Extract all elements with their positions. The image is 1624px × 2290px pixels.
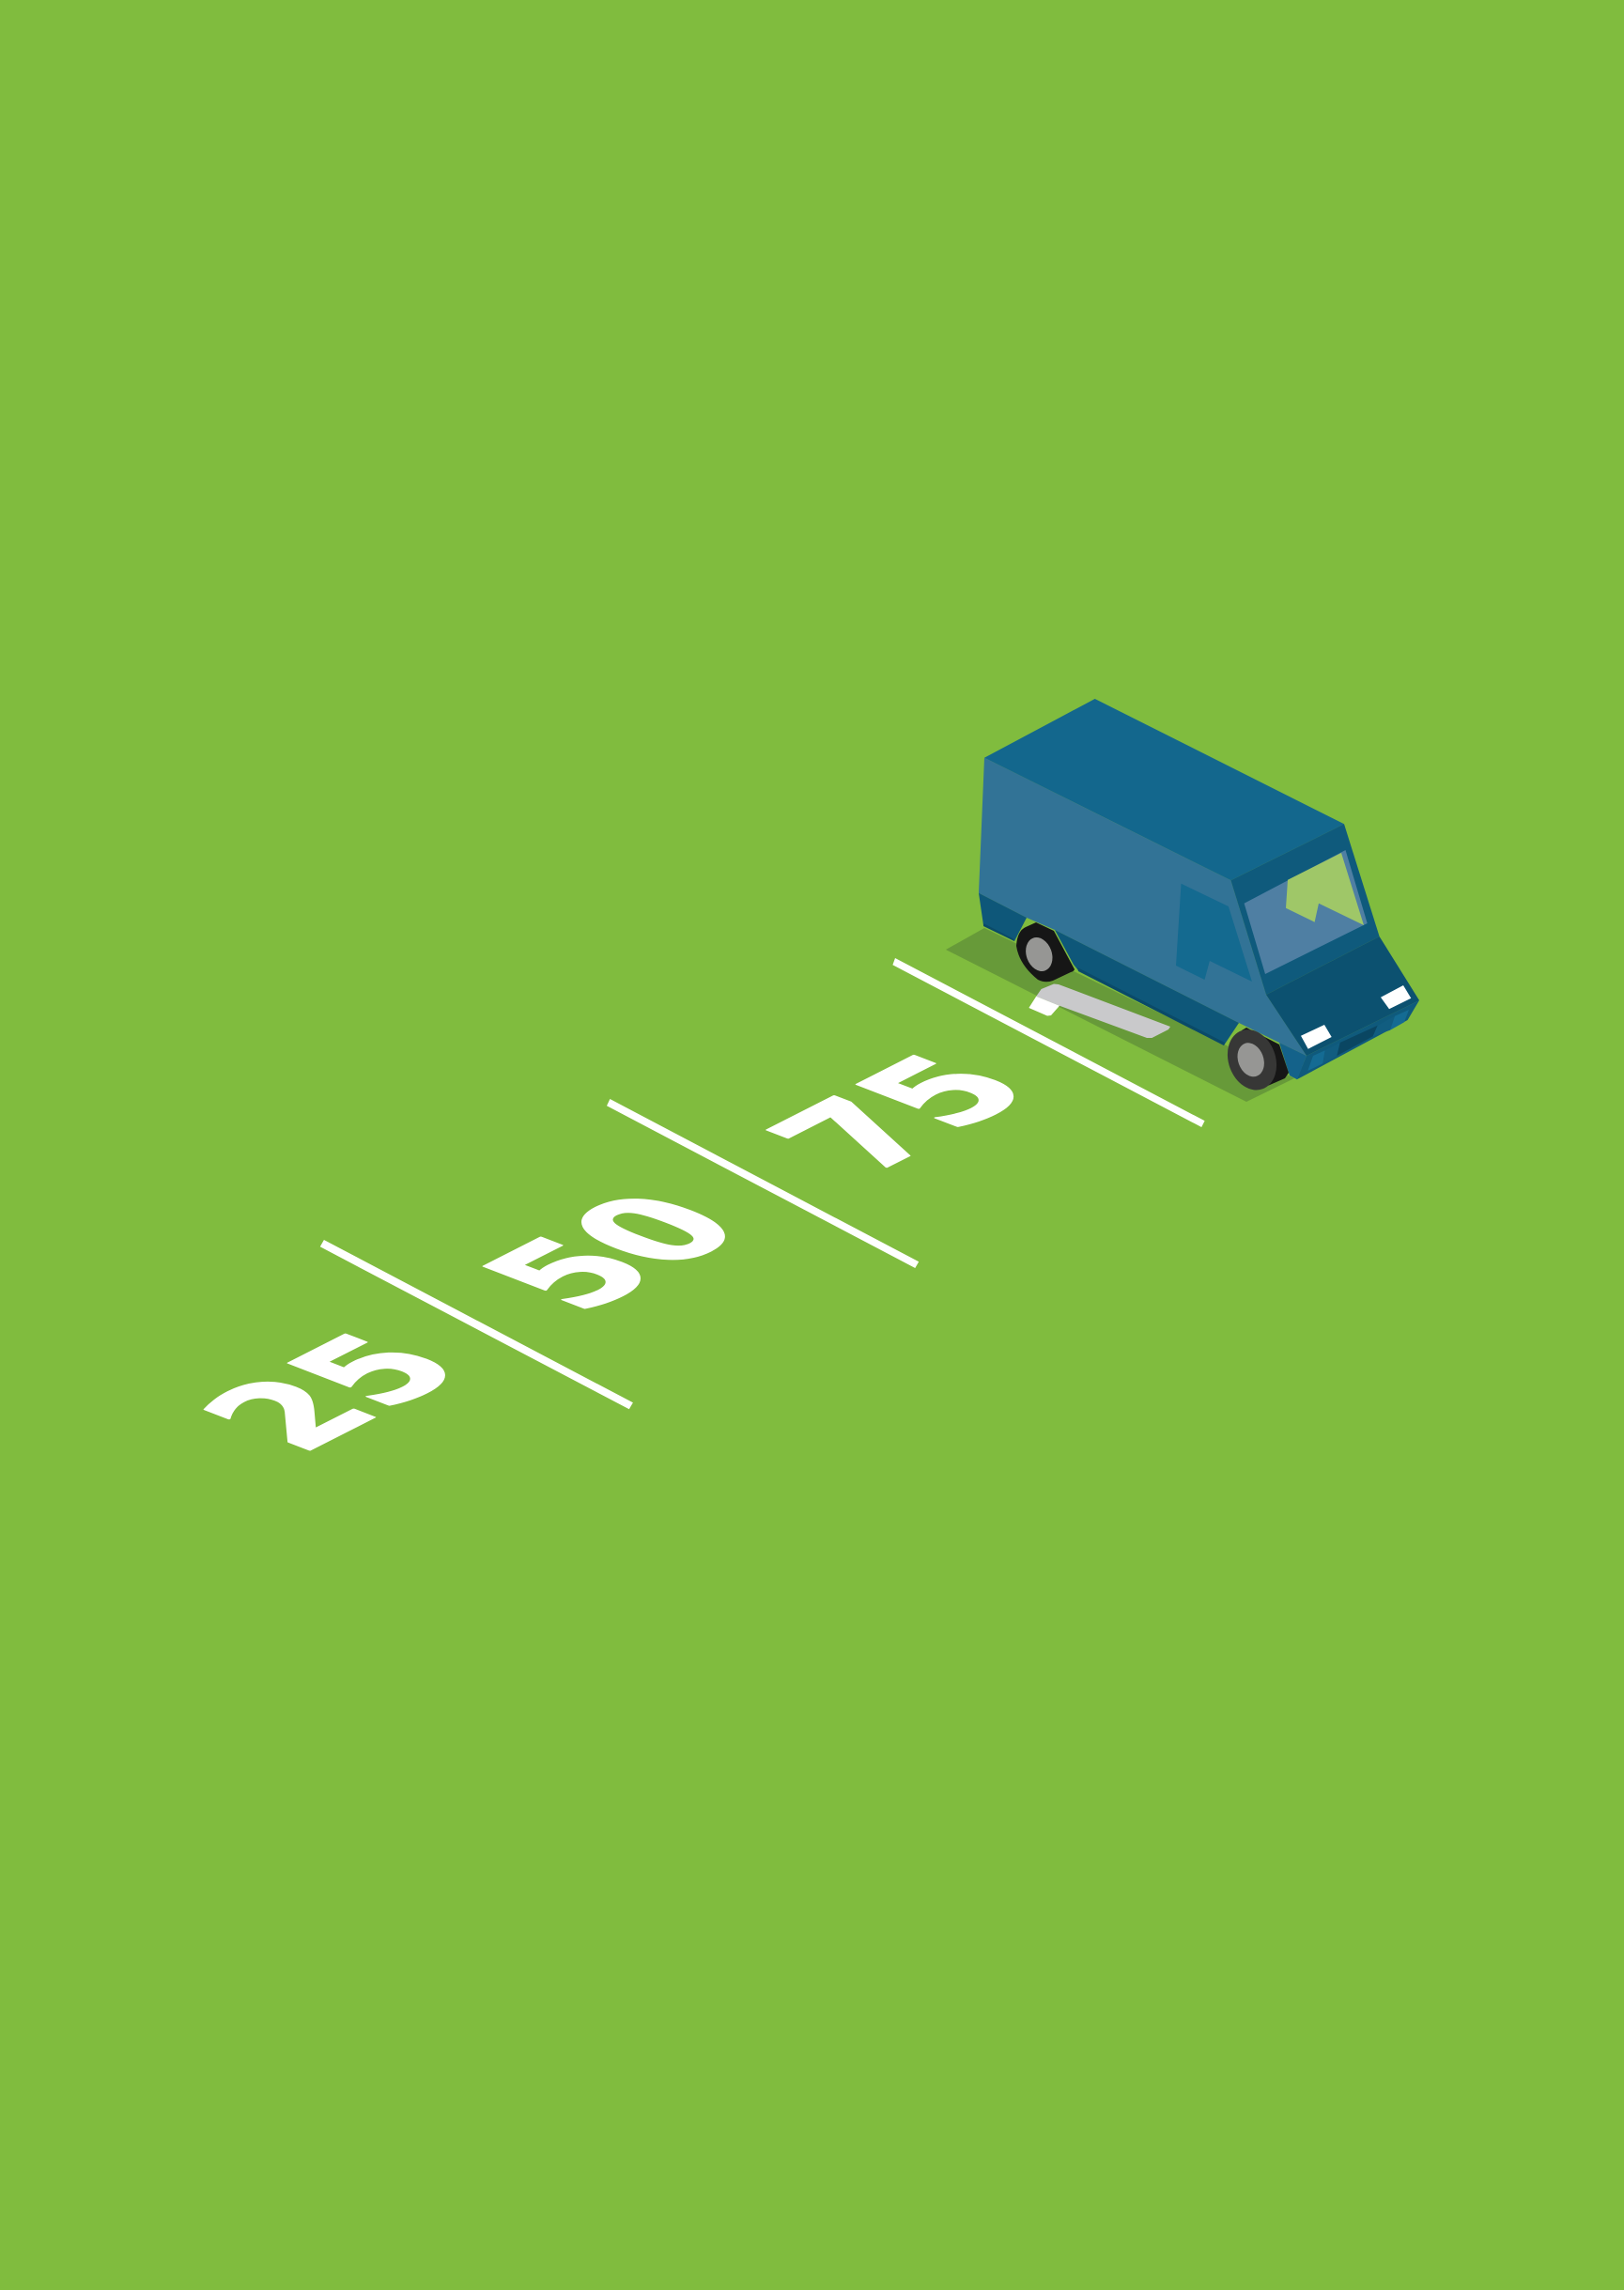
- distance line 3: [892, 958, 1205, 1127]
- distance line 1: [320, 1240, 633, 1409]
- grille lights: [1307, 1010, 1409, 1071]
- rear skirt: [979, 893, 1027, 941]
- cab front frame: [1230, 824, 1380, 995]
- number 75: 75: [729, 1036, 1075, 1190]
- delivery van: [979, 699, 1419, 1097]
- right headlight: [1381, 985, 1411, 1009]
- front bumper: [1297, 1000, 1419, 1079]
- cab corner: [1279, 1043, 1307, 1079]
- windshield reflection: [1286, 853, 1364, 925]
- rear wheel: [1016, 922, 1075, 982]
- windshield: [1245, 850, 1368, 974]
- number 50: 50: [441, 1175, 786, 1329]
- road marking partly under shadow: [1029, 984, 1170, 1038]
- left headlight: [1301, 1025, 1332, 1049]
- van roof: [984, 699, 1344, 880]
- front wheel: [1219, 1023, 1289, 1097]
- hood: [1266, 936, 1419, 1056]
- van shadow on ground: [946, 928, 1294, 1102]
- door window: [1176, 884, 1252, 982]
- distance line 2: [607, 1099, 919, 1268]
- number 25: 25: [161, 1315, 506, 1469]
- middle skirt: [1055, 930, 1239, 1045]
- van side panel: [979, 758, 1307, 1056]
